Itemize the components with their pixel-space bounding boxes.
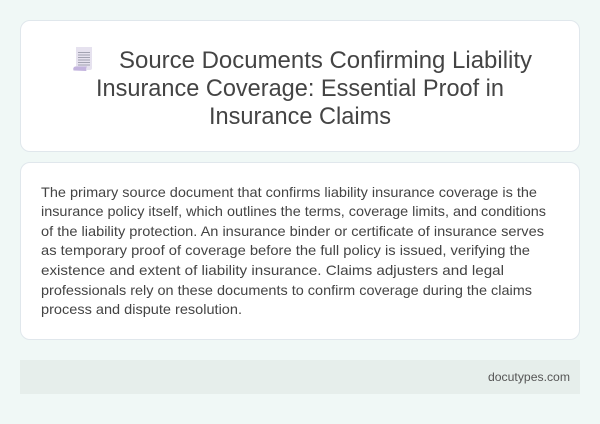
panel: title card — [20, 20, 580, 152]
description text: professionals rely on these documents to confirm coverage during the claims — [41, 282, 532, 298]
description text: process and dispute resolution. — [41, 301, 242, 317]
description text — [41, 184, 546, 317]
panel: footer bar — [20, 360, 580, 394]
title: Insurance Claims — [209, 103, 391, 130]
description text: of the liability protection. An insurance binder or certificate of insurance serves — [41, 223, 544, 239]
panel: description card — [20, 162, 580, 340]
title: Insurance Coverage: Essential Proof in — [96, 75, 504, 102]
footer source label: docutypes.com — [488, 370, 570, 384]
description text: existence and extent of liability insurance. Claims adjusters and legal — [41, 262, 504, 278]
description text: insurance policy itself, which outlines the terms, coverage limits, and conditions — [41, 203, 546, 219]
description text: The primary source document that confirms liability insurance coverage is the — [41, 184, 537, 200]
title — [96, 47, 532, 130]
title: Source Documents Confirming Liability — [119, 47, 532, 74]
description text: as temporary proof of coverage before the full policy is issued, verifying the — [41, 242, 530, 258]
icon: document scroll — [73, 47, 92, 71]
